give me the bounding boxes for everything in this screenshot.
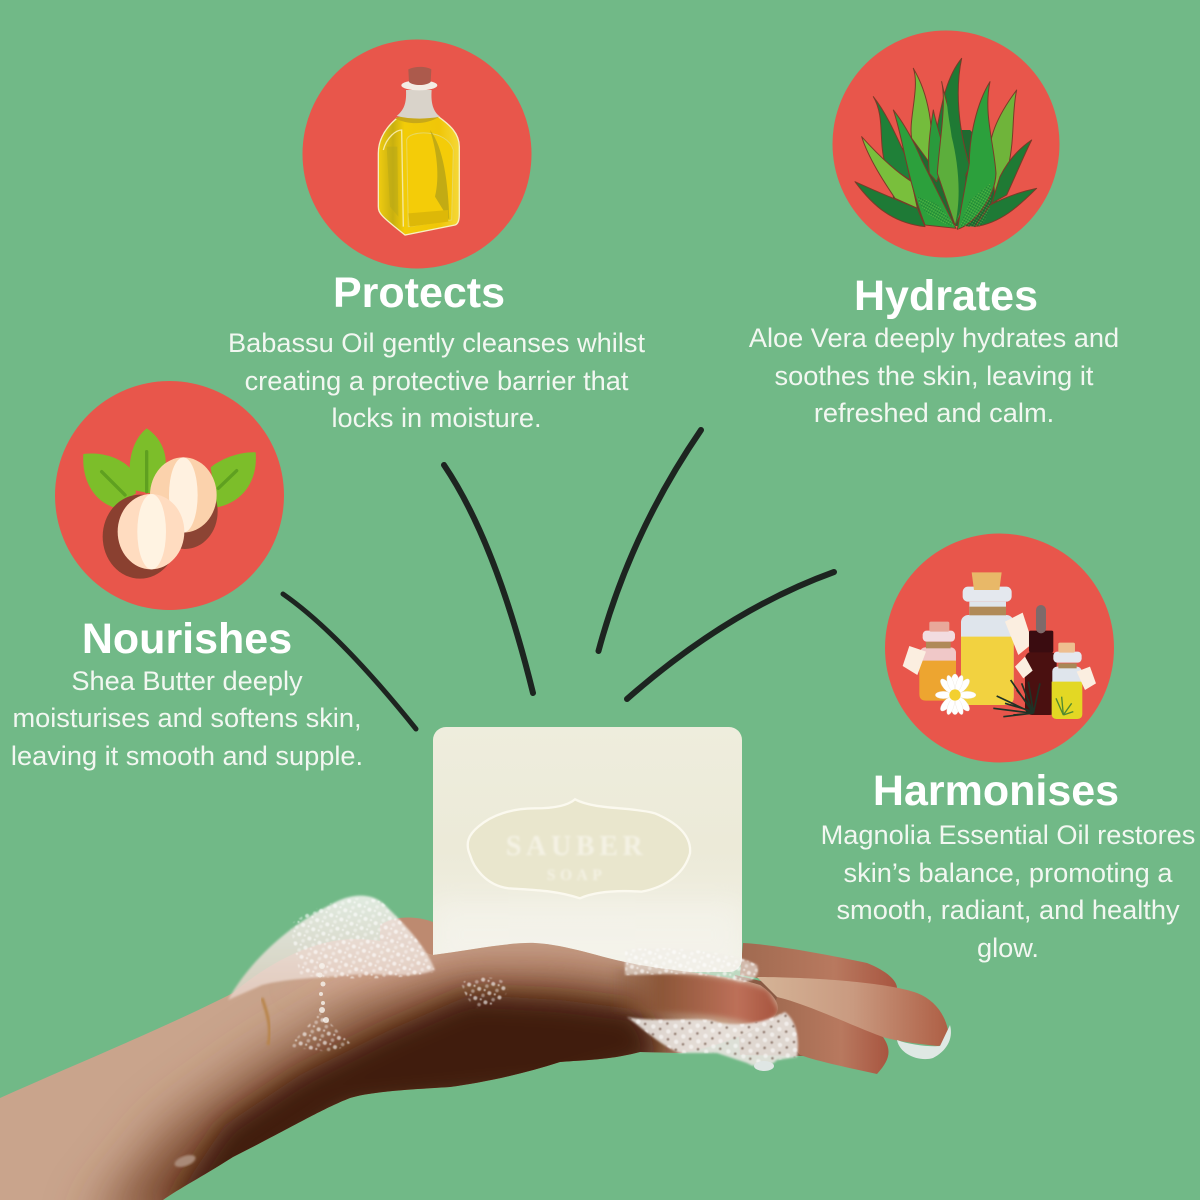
text: Protects description: locks in moisture. — [331, 402, 542, 433]
text: Harmonises description: glow. — [977, 932, 1039, 963]
heading: Protects: Protects — [333, 269, 505, 317]
icon: babassu oil bottle in coral circle — [302, 40, 532, 268]
arrow: line to Hydrates — [598, 430, 701, 651]
finger: ring finger — [770, 997, 889, 1074]
icon: shea nuts and leaves in coral circle — [55, 381, 284, 610]
hand: skin under the fingers — [735, 975, 805, 1056]
text: Protects description: Babassu Oil gently cleanses whilst — [228, 327, 645, 358]
heading: Harmonises: Harmonises — [873, 767, 1119, 815]
text: Nourishes description: Shea Butter deeply — [71, 665, 303, 696]
icon: aloe vera in coral circle — [832, 30, 1060, 258]
arrow: line to Harmonises — [627, 572, 834, 699]
text: Hydrates description: refreshed and calm. — [814, 397, 1054, 428]
finger: middle finger — [757, 977, 948, 1046]
text: Harmonises description: skin’s balance, promoting a — [844, 857, 1173, 888]
text: Protects description: creating a protective barrier that — [245, 365, 629, 396]
icon: essential oil bottles in coral circle — [885, 534, 1114, 762]
soap bar — [433, 727, 742, 972]
text: Nourishes description: leaving it smooth and supple. — [11, 740, 363, 771]
soap embossed label: SAUBER — [506, 831, 647, 862]
soap embossed label: SOAP — [547, 867, 606, 884]
arrow: line to Protects — [444, 465, 533, 693]
text: Harmonises description: smooth, radiant, and healthy — [836, 894, 1180, 925]
arrow: line to Nourishes — [283, 594, 416, 729]
text: Hydrates description: soothes the skin, leaving it — [775, 360, 1094, 391]
text: Hydrates description: Aloe Vera deeply hydrates and — [749, 322, 1119, 353]
hand: palm and forearm — [0, 939, 780, 1200]
foam: bubbles across the back of the hand — [173, 896, 951, 1169]
photo: hand holding soap bar with foam — [0, 727, 951, 1200]
text: Harmonises description: Magnolia Essential Oil restores — [821, 819, 1195, 850]
hand: skin behind the soap — [380, 918, 440, 970]
heading: Hydrates: Hydrates — [854, 272, 1038, 320]
finger: top finger — [740, 943, 897, 988]
heading: Nourishes: Nourishes — [82, 615, 292, 663]
soap embossed label — [468, 799, 690, 898]
text: Nourishes description: moisturises and softens skin, — [12, 702, 362, 733]
